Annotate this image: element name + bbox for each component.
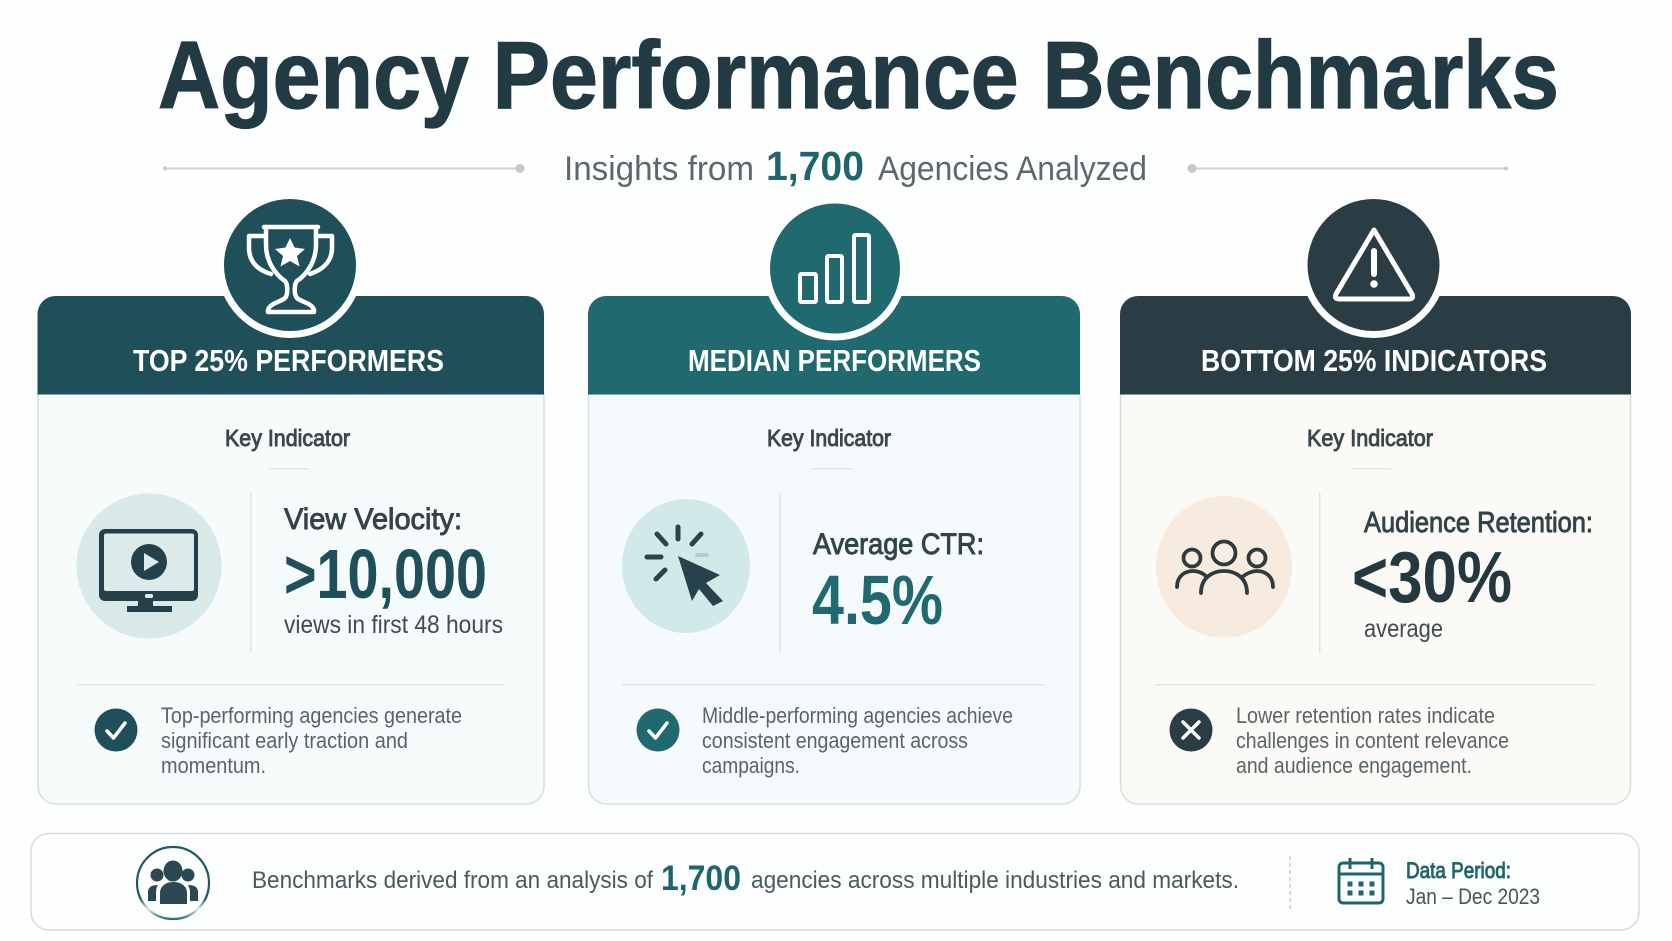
divider — [1319, 493, 1320, 653]
subtitle: 1,700 — [766, 143, 864, 189]
metric: audience retention — [1352, 507, 1593, 643]
metric: audience retention: <30% — [1352, 538, 1512, 618]
key indicator label — [1307, 425, 1433, 470]
key indicator label: Key Indicator — [1307, 425, 1433, 451]
panel: top 25% performers — [38, 192, 544, 804]
footer statement — [252, 859, 1239, 898]
divider — [779, 493, 780, 653]
header label: TOP 25% PERFORMERS — [133, 343, 444, 378]
card header — [38, 296, 544, 394]
icon: people in circle — [137, 847, 209, 919]
description: Middle-performing agencies achieve — [702, 703, 1013, 728]
icon: check — [94, 708, 138, 752]
metric: audience retention: average — [1364, 615, 1443, 643]
key indicator label: Key Indicator — [225, 425, 350, 451]
footer statement: Benchmarks derived from an analysis of — [252, 867, 653, 894]
icon: warning badge — [1300, 192, 1446, 338]
description — [161, 703, 462, 778]
key indicator label — [225, 425, 350, 470]
card body — [1120, 394, 1630, 804]
icon: calendar — [1339, 858, 1383, 903]
description: Lower retention rates indicate — [1236, 703, 1495, 728]
icon: cursor click — [622, 499, 750, 633]
icon: trophy badge — [217, 192, 363, 338]
divider — [250, 493, 252, 653]
footer statement: agencies across multiple industries and markets. — [751, 867, 1239, 894]
panel: bottom 25% indicators — [1120, 192, 1631, 804]
subtitle: Agencies Analyzed — [878, 150, 1147, 188]
header label: BOTTOM 25% INDICATORS — [1201, 343, 1547, 378]
panel: median performers — [588, 196, 1080, 804]
card header — [588, 296, 1080, 394]
description: and audience engagement. — [1236, 753, 1472, 778]
footer box — [31, 834, 1639, 930]
card body — [38, 394, 544, 804]
card header — [1120, 296, 1631, 394]
description: consistent engagement across — [702, 728, 968, 753]
description: campaigns. — [702, 753, 800, 778]
header label: MEDIAN PERFORMERS — [688, 343, 981, 378]
subtitle: Insights from — [564, 150, 754, 188]
key indicator label: Key Indicator — [767, 425, 891, 451]
description: challenges in content relevance — [1236, 728, 1509, 753]
data period: Jan – Dec 2023 — [1406, 884, 1540, 909]
subtitle — [163, 143, 1508, 189]
description: significant early traction and — [161, 728, 408, 753]
metric: view velocity: View Velocity: — [284, 503, 462, 536]
icon: cross — [1170, 708, 1212, 752]
description: Top-performing agencies generate — [161, 703, 462, 728]
footer statement: 1,700 — [661, 859, 741, 898]
icon: audience — [1156, 496, 1292, 638]
card body — [588, 394, 1080, 804]
metric: view velocity: >10,000 — [284, 535, 487, 613]
metric: average CTR: 4.5% — [812, 561, 943, 639]
panel: footer — [31, 834, 1639, 930]
metric: average CTR: Average CTR: — [813, 528, 984, 561]
description: momentum. — [161, 753, 266, 778]
metric: audience retention: Audience Retention: — [1364, 507, 1593, 539]
icon: bar chart badge — [763, 196, 907, 340]
metric: view velocity — [284, 503, 503, 639]
metric: average CTR — [812, 528, 984, 639]
icon: check — [636, 708, 680, 752]
data period: Data Period: — [1406, 858, 1511, 883]
icon: monitor with play — [76, 494, 222, 638]
key indicator label — [767, 425, 891, 470]
data period — [1406, 858, 1540, 909]
metric: view velocity: views in first 48 hours — [284, 611, 503, 639]
description — [702, 703, 1013, 778]
description — [1236, 703, 1509, 778]
